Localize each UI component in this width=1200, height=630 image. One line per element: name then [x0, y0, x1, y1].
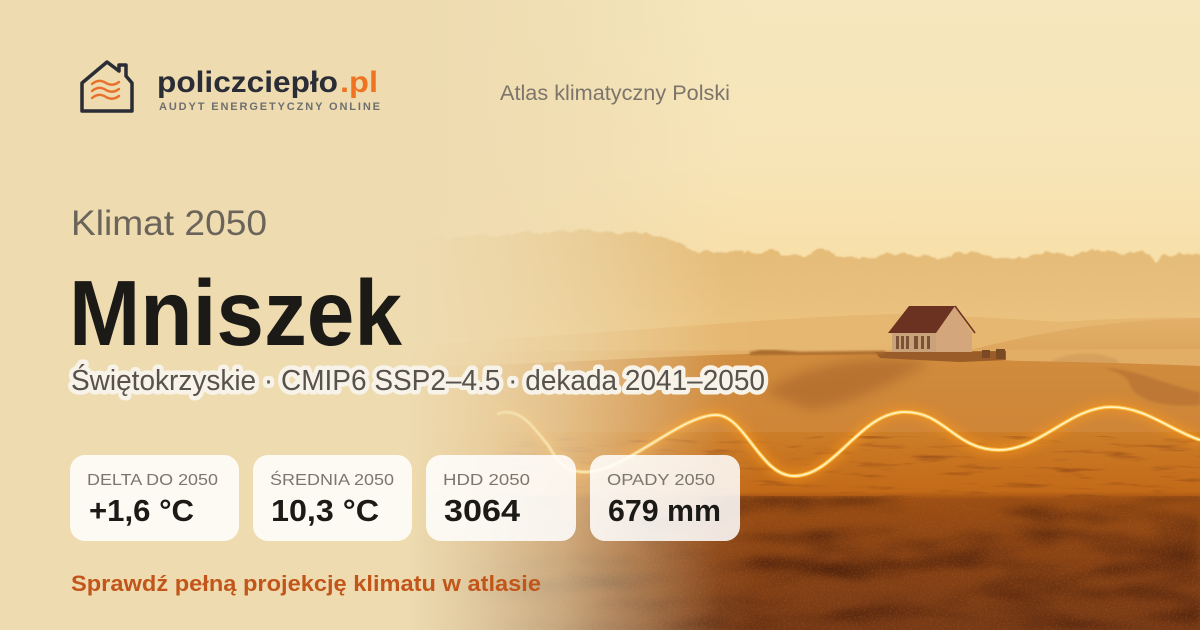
house: [875, 306, 1006, 362]
card: HDD: 3064: [444, 493, 521, 528]
stat cards: [70, 455, 740, 541]
card: average: 10,3 °C: [271, 493, 379, 528]
logo domain: .pl: [340, 66, 378, 99]
field dark patches: [400, 496, 1200, 630]
card: precipitation: [590, 455, 740, 541]
dune field: [400, 353, 1200, 440]
card: precipitation: 679 mm: [608, 493, 721, 528]
call to action: Sprawdź pełną projekcję klimatu w atlasie: [71, 571, 541, 596]
eyebrow: Klimat 2050: [71, 204, 267, 243]
distant tree line: [400, 231, 1200, 340]
dune shadows: [765, 359, 930, 410]
logo: [82, 62, 380, 113]
card: average: ŚREDNIA 2050: [270, 470, 394, 489]
card: precipitation: OPADY 2050: [607, 472, 715, 489]
card: delta: [70, 455, 239, 541]
logo tagline: AUDYT ENERGETYCZNY ONLINE: [159, 101, 380, 113]
field marks: [400, 436, 1200, 498]
card: delta: +1,6 °C: [89, 493, 194, 528]
lower field: [400, 432, 1200, 630]
hazy hills: [400, 314, 1200, 362]
card: average: [253, 455, 412, 541]
field specks: [400, 440, 1200, 630]
header label: Atlas klimatyczny Polski: [500, 82, 730, 105]
icon: house with heat waves: [82, 62, 132, 111]
wave glow: [497, 407, 1200, 476]
subtitle: Świętokrzyskie · CMIP6 SSP2–4.5 · dekada 2041–2050: [71, 363, 765, 397]
logo wordmark: policzciepło: [157, 66, 338, 99]
card: HDD: [426, 455, 576, 541]
title: Mniszek: [69, 261, 402, 365]
card: HDD: HDD 2050: [443, 472, 530, 489]
card: delta: DELTA DO 2050: [87, 472, 218, 489]
